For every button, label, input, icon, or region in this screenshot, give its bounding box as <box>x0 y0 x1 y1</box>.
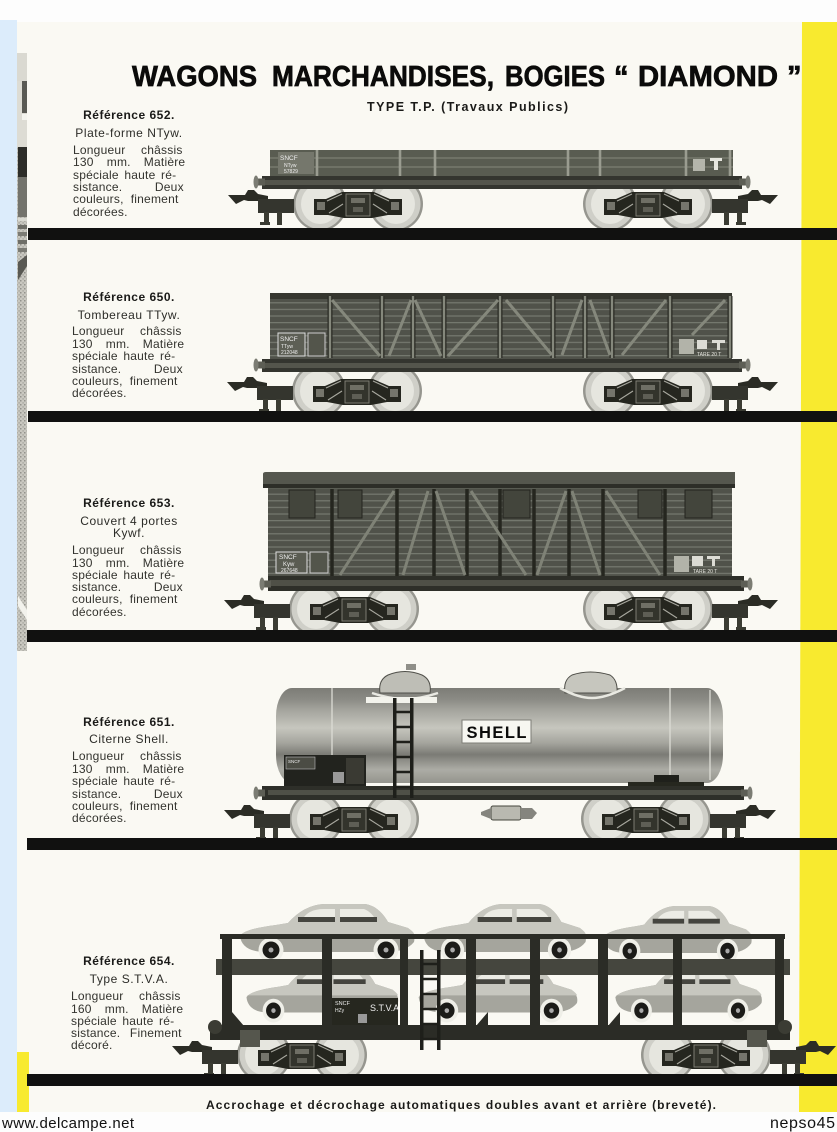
text block: reference 652: couleurs, finement <box>73 192 179 206</box>
wagon 652: flat wagon: NTyw <box>284 163 297 169</box>
text block: reference 650: Longueur châssis <box>72 324 182 338</box>
Shell label <box>462 720 531 743</box>
text block: reference 653: Couvert 4 portes <box>80 514 178 528</box>
text block: reference 651: décorées. <box>72 811 127 825</box>
text block: reference 653: Kywf. <box>113 526 145 540</box>
subtitle: TYPE T.P. (Travaux Publics) <box>367 100 568 114</box>
text block: reference 652: sistance. Deux <box>73 180 184 194</box>
wagon 653: covered wagon <box>224 472 778 636</box>
STVA plate: HZy <box>335 1008 345 1014</box>
text block: reference 650: décorées. <box>72 386 127 400</box>
title: ” <box>787 61 802 93</box>
track rails <box>27 228 837 1086</box>
wagon 652: flat wagon: SNCF <box>280 155 298 162</box>
STVA plate <box>332 998 399 1025</box>
wagon 650: open wagon: 212048 <box>281 350 298 356</box>
text block: reference 652 <box>73 108 185 219</box>
yellow bottom-left patch <box>17 1052 29 1112</box>
STVA plate: S.T.V.A <box>370 1003 399 1013</box>
text block: reference 653: spéciale haute ré- <box>72 568 175 582</box>
text block: reference 650: Tombereau TTyw. <box>78 308 180 322</box>
text block: reference 651: sistance. Deux <box>72 787 183 801</box>
wagon 651: Shell tank wagon <box>224 664 776 846</box>
text block: reference 653: décorées. <box>72 605 127 619</box>
title: “ <box>614 61 628 93</box>
text block: reference 652: spéciale haute ré- <box>73 168 176 182</box>
text block: reference 650: spéciale haute ré- <box>72 349 175 363</box>
left edge strip of adjoining page <box>17 53 27 651</box>
text block: reference 654 <box>71 954 183 1052</box>
data plate <box>284 755 366 786</box>
text block: reference 653 <box>72 496 184 619</box>
data plate: SNCF <box>288 759 301 764</box>
text block: reference 652: Plate-forme NTyw. <box>75 126 183 140</box>
text block: reference 650: Référence 650. <box>83 290 175 304</box>
yellow right band <box>799 22 837 1112</box>
text block: reference 654: décoré. <box>71 1038 113 1052</box>
text block: reference 651: Citerne Shell. <box>89 732 169 746</box>
text block: reference 651: couleurs, finement <box>72 799 178 813</box>
text block: reference 653: 130 mm. Matière <box>72 556 184 570</box>
text block: reference 654: Référence 654. <box>83 954 175 968</box>
wagon 650: open wagon: TARE 20 T <box>697 352 721 358</box>
text block: reference 653: couleurs, finement <box>72 592 178 606</box>
brake cylinder <box>481 806 537 820</box>
text block: reference 650 <box>72 290 184 400</box>
title: WAGONS <box>132 61 257 93</box>
cars: lower deck <box>246 967 762 1022</box>
text block: reference 650: 130 mm. Matière <box>72 337 184 351</box>
text block: reference 651: Longueur châssis <box>72 749 182 763</box>
wagon 650: open wagon: TTyw <box>281 344 293 350</box>
text block: reference 654: spéciale haute ré- <box>71 1014 174 1028</box>
footer note: Accrochage et décrochage automatiques doubles avant et arrière (breveté). <box>206 1098 716 1112</box>
wagon 652: flat wagon: 57829 <box>284 169 298 175</box>
transporter frame <box>210 934 790 1040</box>
wagon 653: covered wagon: 267648 <box>281 568 298 574</box>
domes <box>372 664 625 699</box>
text block: reference 652: Longueur châssis <box>73 143 183 157</box>
watermark: site: www.delcampe.net <box>1 1115 135 1132</box>
text block: reference 652: 130 mm. Matière <box>73 155 185 169</box>
text block: reference 652: Référence 652. <box>83 108 175 122</box>
text block: reference 653: sistance. Deux <box>72 580 183 594</box>
text block: reference 651: 130 mm. Matière <box>72 762 184 776</box>
watermark: seller: nepso45 <box>770 1115 835 1132</box>
wagon 653: covered wagon: SNCF <box>279 554 297 561</box>
text block: reference 651: spéciale haute ré- <box>72 774 175 788</box>
wagon 654: car transporter <box>172 904 836 1082</box>
STVA plate: SNCF <box>335 1001 351 1007</box>
title <box>132 61 802 93</box>
wagon 653: covered wagon: Kyw <box>283 562 295 568</box>
title: MARCHANDISES, <box>272 61 494 93</box>
text block: reference 653: Référence 653. <box>83 496 175 510</box>
title: BOGIES <box>505 61 605 93</box>
wagon 652: flat wagon <box>228 150 778 231</box>
platform <box>366 697 437 703</box>
text block: reference 652: décorées. <box>73 205 128 219</box>
tank body <box>276 688 723 787</box>
text block: reference 654: Longueur châssis <box>71 989 181 1003</box>
text block: reference 651 <box>72 715 184 825</box>
wagon 653: covered wagon: TARE 20 T <box>693 569 717 575</box>
text block: reference 651: Référence 651. <box>83 715 175 729</box>
Shell label: SHELL <box>466 724 526 742</box>
text block: reference 650: couleurs, finement <box>72 374 178 388</box>
text block: reference 650: sistance. Deux <box>72 362 183 376</box>
text block: reference 654: sistance. Finement <box>71 1026 182 1040</box>
text block: reference 654: 160 mm. Matière <box>71 1002 183 1016</box>
cars: upper deck <box>240 904 752 963</box>
text block: reference 654: Type S.T.V.A. <box>90 972 168 986</box>
title: DIAMOND <box>638 61 778 93</box>
text block: reference 653: Longueur châssis <box>72 543 182 557</box>
wagon 650: open wagon: SNCF <box>280 336 298 343</box>
wagon 650: open wagon <box>227 293 778 418</box>
